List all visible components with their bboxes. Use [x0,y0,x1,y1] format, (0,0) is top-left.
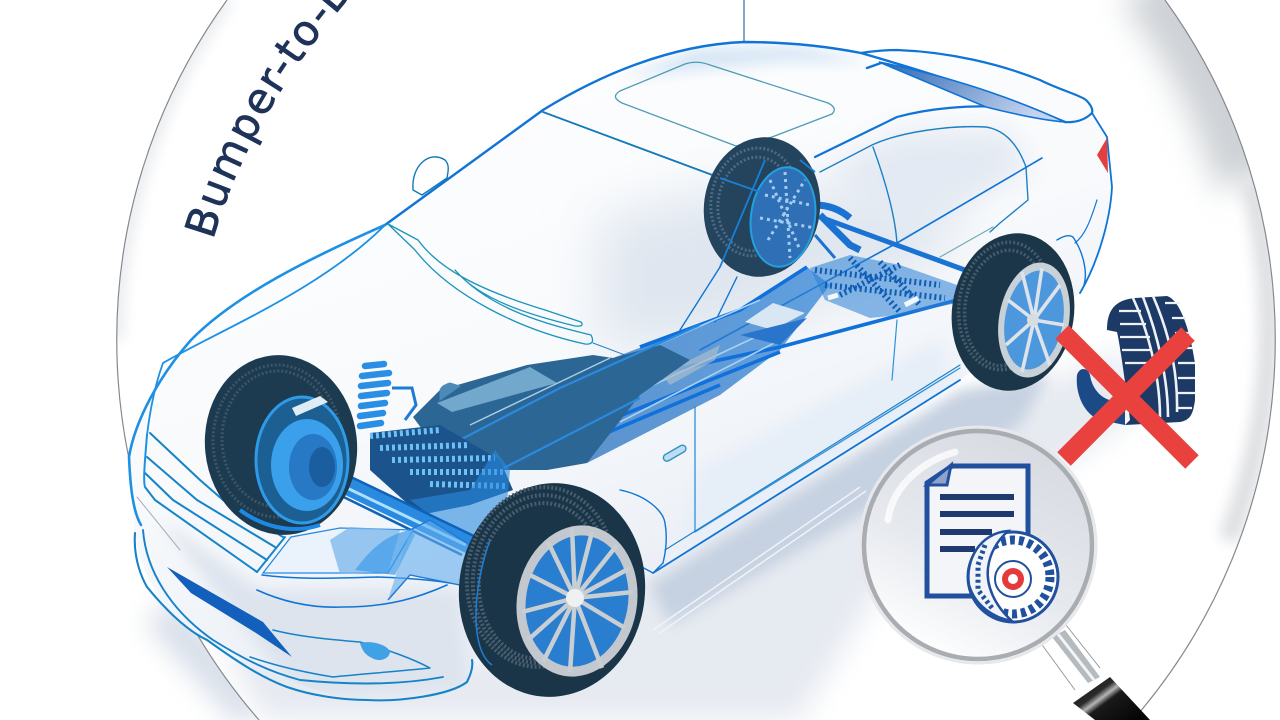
grille bars [145,433,283,572]
rear axle [820,217,973,273]
magnifying glass [860,427,1150,720]
car outline lines [129,42,1112,700]
handle [1040,625,1150,720]
left front wheel [196,348,366,542]
rear differential blob [810,255,957,318]
tire [1077,296,1195,425]
vertical pointer line [743,0,745,72]
rear top wheel [695,130,829,284]
car body [129,42,1112,700]
axle tube [320,473,470,545]
suspension spring [360,364,389,426]
lens [864,431,1092,659]
icon: brake disc [968,531,1058,622]
dark grille intake [167,567,292,657]
right front wheel [448,474,656,706]
door handle [662,444,687,462]
engine block [370,425,513,515]
rear right wheel [942,225,1084,399]
ground shadow outside circle [160,610,255,715]
front wheel well parts [263,528,413,573]
floor shadow [220,350,1130,720]
long chassis band [587,267,830,463]
red cross [1062,332,1192,462]
chassis and drivetrain [263,205,973,600]
icon: crossed out tire [1062,296,1195,462]
engine cover [413,345,690,470]
rear light [1097,138,1108,173]
fog lamp [360,642,390,660]
car [129,42,1112,706]
spoiler slit [879,62,1065,122]
icon: document [927,465,1028,596]
